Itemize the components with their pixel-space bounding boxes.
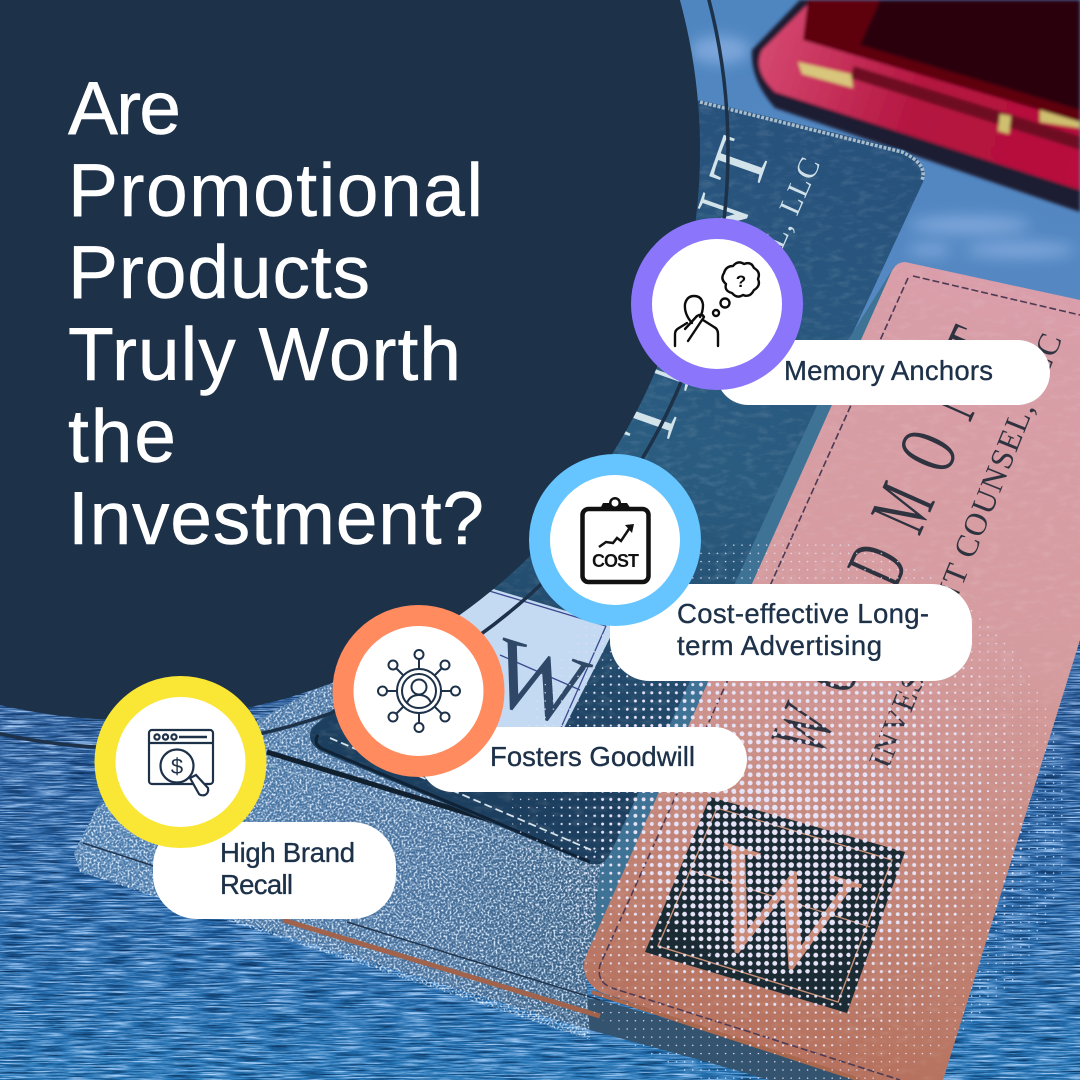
item: Memory Anchors bbox=[642, 228, 1050, 405]
engraved folder lettering: TMENT bbox=[602, 128, 787, 456]
label pill: Cost-effective: term Advertising bbox=[677, 630, 882, 661]
icon: connected person network bbox=[378, 650, 460, 732]
item: High Brand Recall bbox=[105, 686, 396, 919]
engraved small lettering on navy folder: L, LLC bbox=[758, 153, 827, 253]
orange ring bbox=[343, 616, 494, 766]
title: Investment? bbox=[68, 476, 484, 560]
title: Products bbox=[68, 230, 370, 314]
label pill: Fosters Goodwill bbox=[420, 727, 747, 792]
yellow ring bbox=[105, 686, 256, 838]
title bbox=[68, 66, 484, 560]
icon: thinking person bbox=[675, 262, 759, 346]
pink leather folder bbox=[570, 255, 1080, 1080]
label pill: Cost-effective bbox=[610, 584, 972, 681]
denim spine beside navy folder bbox=[590, 265, 895, 960]
item: Cost-effective Long-term Advertising bbox=[540, 464, 972, 681]
icon: cost clipboard: COST bbox=[592, 551, 639, 571]
label pill: High Brand Recall: Recall bbox=[220, 869, 293, 900]
label pill: Cost-effective: Cost-effective Long- bbox=[677, 598, 929, 629]
icon: dollar magnifier on browser bbox=[149, 730, 213, 795]
title: Are bbox=[68, 66, 181, 150]
black logo square with W bbox=[645, 797, 905, 1013]
black logo square with W: W bbox=[685, 809, 873, 1013]
embossed light square with W on navy folder: W bbox=[478, 615, 601, 749]
purple ring bbox=[642, 228, 792, 380]
icon: dollar magnifier on browser: $ bbox=[171, 754, 183, 779]
embossed light square with W on navy folder bbox=[400, 588, 616, 760]
fabric folder bbox=[60, 660, 880, 1080]
engraved subtitle on pink folder: INVESTMENT COUNSEL, LLC bbox=[861, 328, 1069, 773]
title: the bbox=[68, 394, 176, 478]
label pill: Fosters Goodwill: Fosters Goodwill bbox=[490, 741, 695, 772]
label pill: High Brand Recall: High Brand bbox=[220, 837, 355, 868]
label pill: Memory Anchors bbox=[716, 340, 1050, 405]
icon: thinking person: ? bbox=[736, 272, 746, 291]
navy leather folder bbox=[300, 100, 940, 880]
icon: cost clipboard bbox=[582, 497, 648, 582]
label pill: Memory Anchors: Memory Anchors bbox=[784, 355, 993, 386]
title: Truly Worth bbox=[68, 312, 461, 396]
navy title panel bbox=[0, 0, 700, 720]
label pill: High Brand Recall bbox=[153, 822, 396, 919]
thin connector arc bbox=[0, 0, 728, 748]
title: Promotional bbox=[68, 148, 483, 232]
red pen box bbox=[752, 0, 1080, 212]
item: Fosters Goodwill bbox=[343, 616, 747, 792]
blue ring bbox=[540, 464, 690, 616]
halftone dots overlay bbox=[512, 537, 1068, 1080]
engraved name on pink folder: WOODMONT bbox=[754, 315, 1022, 768]
